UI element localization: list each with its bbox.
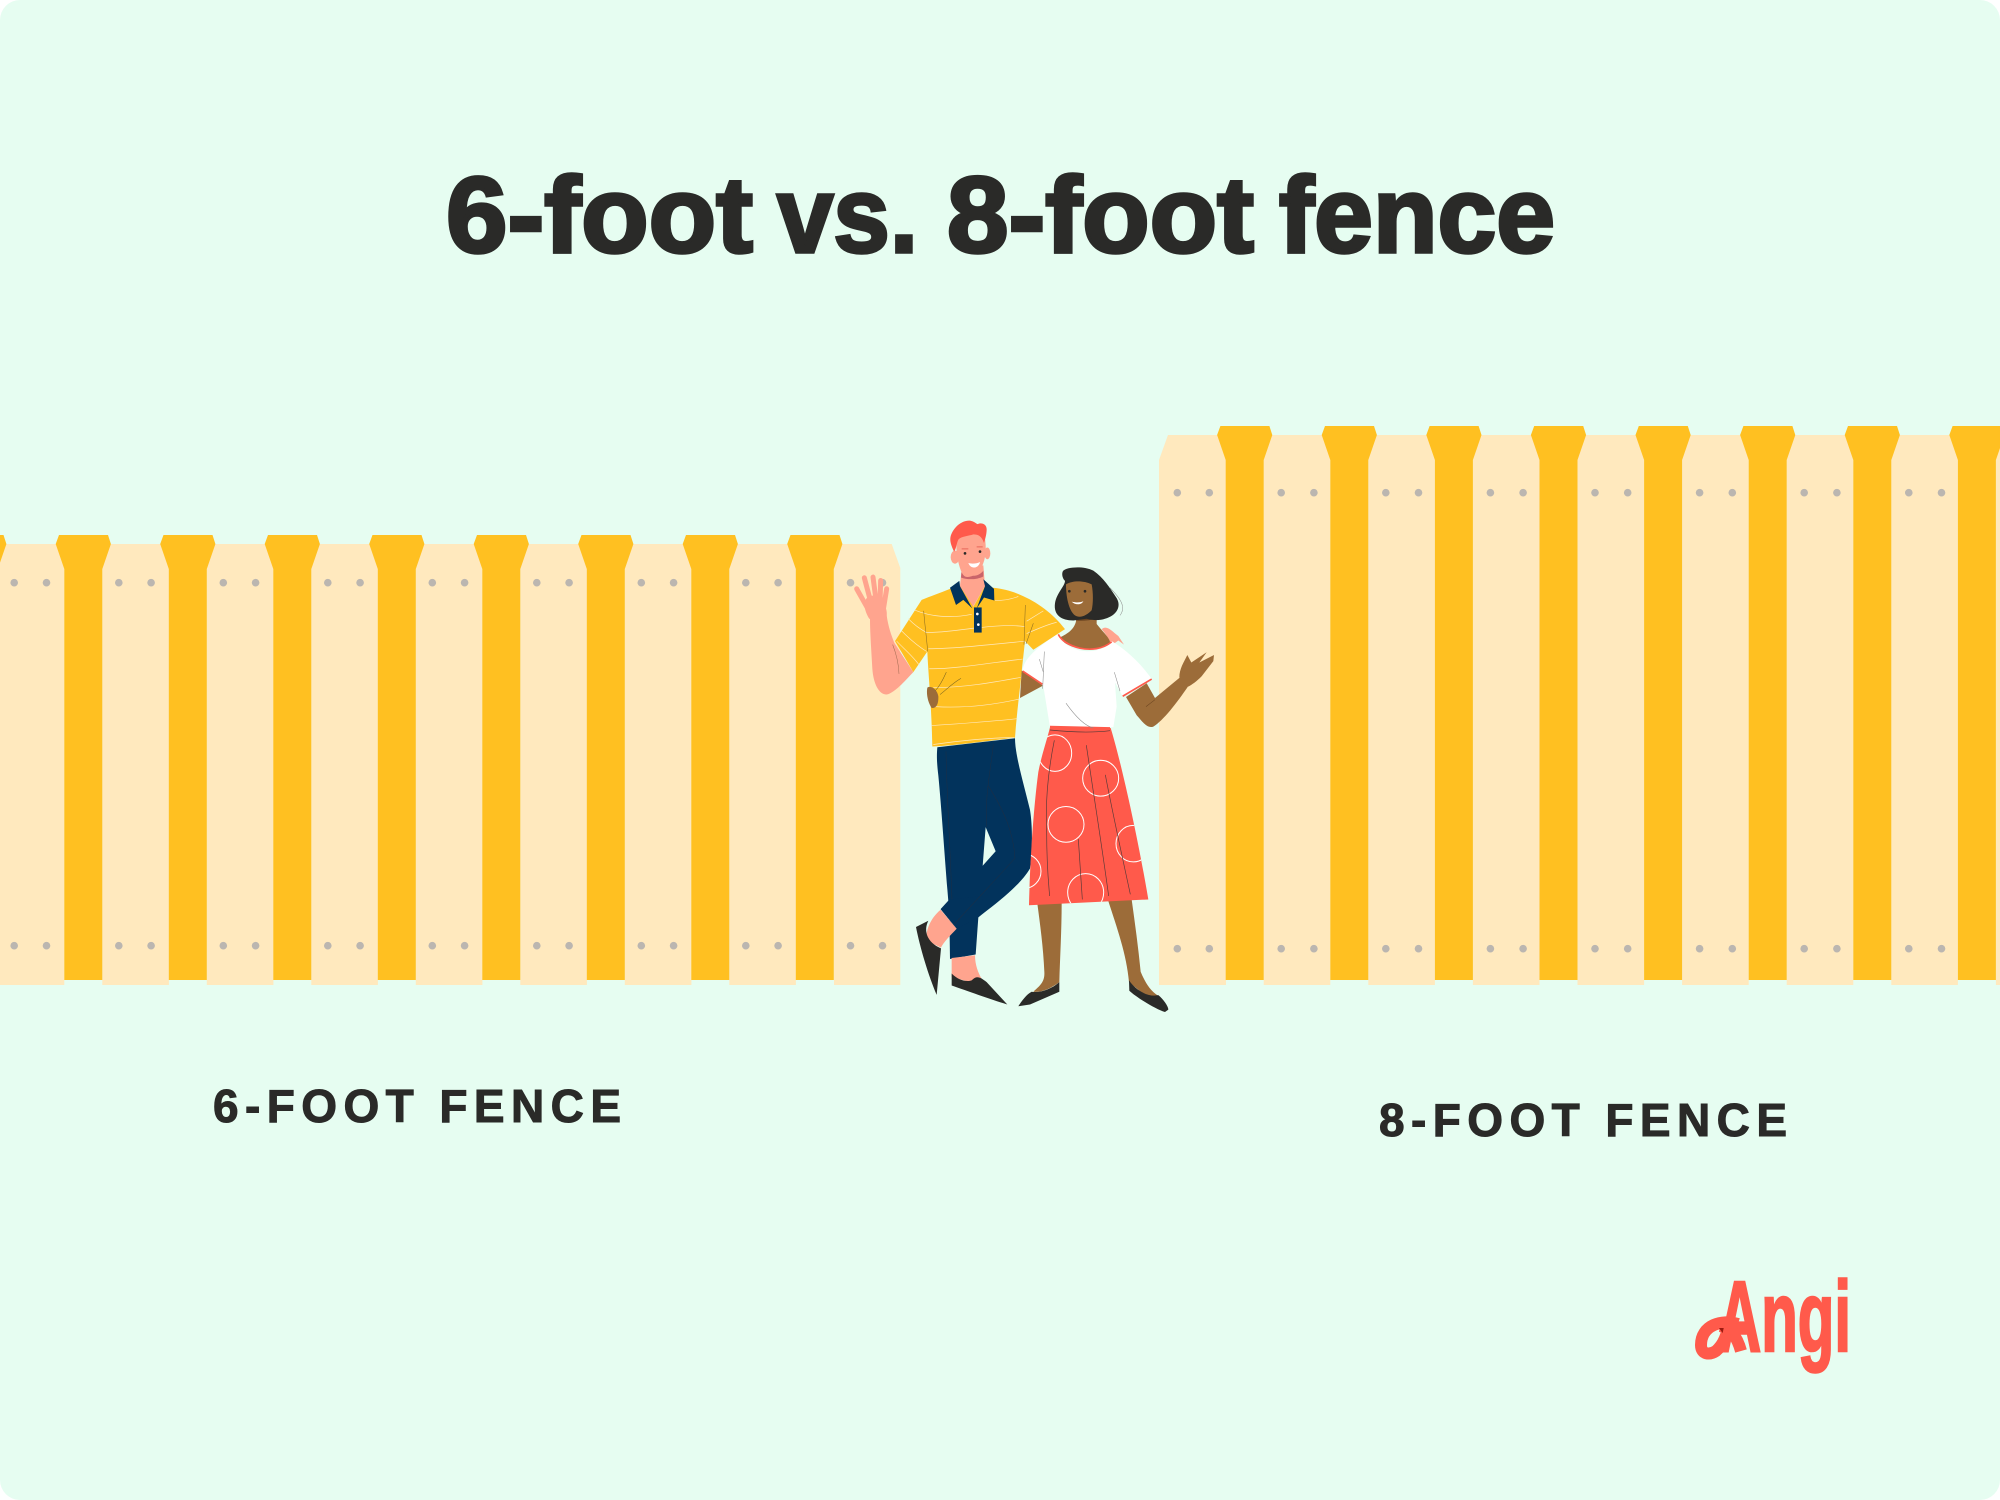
label: 6-foot fence: 6-FOOT FENCE	[213, 1080, 621, 1132]
woman arm behind man	[927, 670, 1042, 708]
title: fence	[1279, 154, 1555, 275]
woman extended arm and hand	[1126, 652, 1214, 727]
title: vs.	[777, 154, 918, 275]
logo: Angi: Angi	[1718, 1261, 1851, 1373]
title: 8-foot	[947, 154, 1254, 275]
6-foot fence illustration	[0, 535, 900, 985]
man hand on woman shoulder	[1102, 628, 1124, 645]
man figure	[857, 521, 1065, 1004]
woman figure	[927, 567, 1214, 1012]
man polo shirt	[895, 586, 1065, 747]
woman neck and chest	[1059, 612, 1110, 649]
woman white blouse	[1023, 634, 1152, 728]
man raised arm and hand	[857, 577, 913, 695]
man trousers	[937, 738, 1032, 959]
couple illustration	[857, 521, 1214, 1012]
logo: Angi	[1701, 1261, 1851, 1373]
man collar and placket	[950, 579, 994, 633]
woman head and hair	[1055, 567, 1123, 621]
woman legs	[1033, 899, 1158, 999]
man shoes	[916, 921, 1007, 1004]
8-foot fence illustration	[1159, 426, 2000, 985]
label: 8-foot fence: 8-FOOT FENCE	[1379, 1094, 1787, 1146]
man neck	[960, 565, 985, 607]
man head	[950, 521, 990, 577]
woman shoes	[1018, 980, 1168, 1012]
man ankles	[926, 910, 982, 982]
woman skirt	[1029, 728, 1148, 906]
title: 6-foot	[446, 154, 753, 275]
